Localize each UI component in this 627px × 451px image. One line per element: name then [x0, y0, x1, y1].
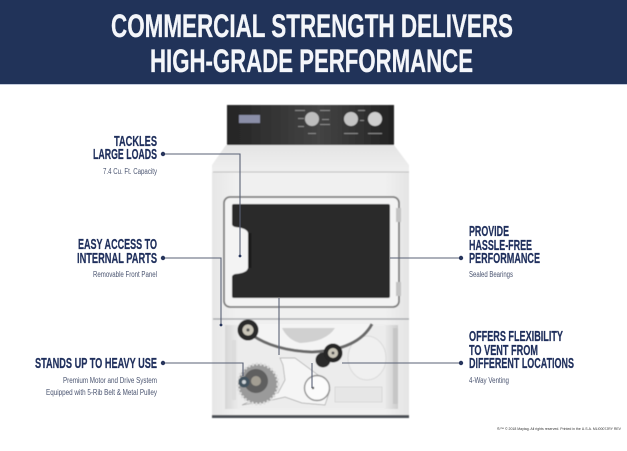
- title: HIGH-GRADE PERFORMANCE: [150, 43, 473, 79]
- callout: stands up to heavy use: Equipped with 5-Rib Belt & Metal Pulley: [46, 388, 157, 397]
- callout: tackles large loads: [93, 134, 241, 257]
- cabinet top: [212, 145, 409, 176]
- right roller: [324, 344, 342, 362]
- header banner: [0, 0, 627, 85]
- callout: provide hassle-free performance: PROVIDE: [469, 224, 509, 240]
- callout: easy access to internal parts: EASY ACCESS TO: [78, 237, 157, 253]
- copyright note: ®/™ © 2018 Maytag. All rights reserved. Printed in the U.S.A. MLI0007JRY REV: [497, 427, 622, 431]
- right dial: [368, 112, 382, 126]
- callout: provide hassle-free performance: [390, 224, 540, 279]
- cycle dial: [305, 112, 319, 126]
- callout: offers flexibility: [342, 329, 574, 385]
- callout: offers flexibility: OFFERS FLEXIBILITY: [469, 329, 563, 345]
- callout: easy access to internal parts: Removable Front Panel: [93, 270, 157, 279]
- callout: stands up to heavy use: STANDS UP TO HEAVY USE: [35, 356, 157, 372]
- callout: provide hassle-free performance: Sealed Bearings: [469, 270, 513, 279]
- callout: provide hassle-free performance: HASSLE-FREE: [469, 238, 532, 254]
- drum: [240, 324, 372, 352]
- callout: provide hassle-free performance: PERFORMANCE: [469, 251, 540, 267]
- motor: [238, 364, 278, 404]
- belt and bracket: [242, 358, 330, 405]
- callout: tackles large loads: LARGE LOADS: [93, 147, 157, 163]
- callout: stands up to heavy use: [35, 298, 312, 397]
- brand badge: [239, 115, 260, 123]
- door window: [232, 204, 390, 298]
- callout: tackles large loads: 7.4 Cu. Ft. Capacity: [103, 167, 157, 176]
- dryer illustration: [212, 105, 409, 418]
- vent housing: [348, 336, 386, 380]
- callout: tackles large loads: TACKLES: [114, 134, 157, 150]
- left dial: [344, 112, 358, 126]
- callout: stands up to heavy use: Premium Motor and Drive System: [63, 376, 157, 385]
- left roller: [238, 320, 258, 340]
- title: [111, 8, 513, 79]
- cabinet body: [212, 172, 409, 418]
- callout: easy access to internal parts: [77, 237, 222, 326]
- door panel: [224, 197, 401, 307]
- small roller: [316, 352, 330, 368]
- pulley: [304, 376, 330, 400]
- control console: [227, 105, 394, 145]
- callout: offers flexibility: 4-Way Venting: [469, 376, 509, 385]
- callout: easy access to internal parts: INTERNAL PARTS: [77, 251, 157, 267]
- callout: offers flexibility: TO VENT FROM: [469, 343, 538, 359]
- lower cabinet interior: [225, 320, 398, 409]
- mesh: [282, 328, 335, 343]
